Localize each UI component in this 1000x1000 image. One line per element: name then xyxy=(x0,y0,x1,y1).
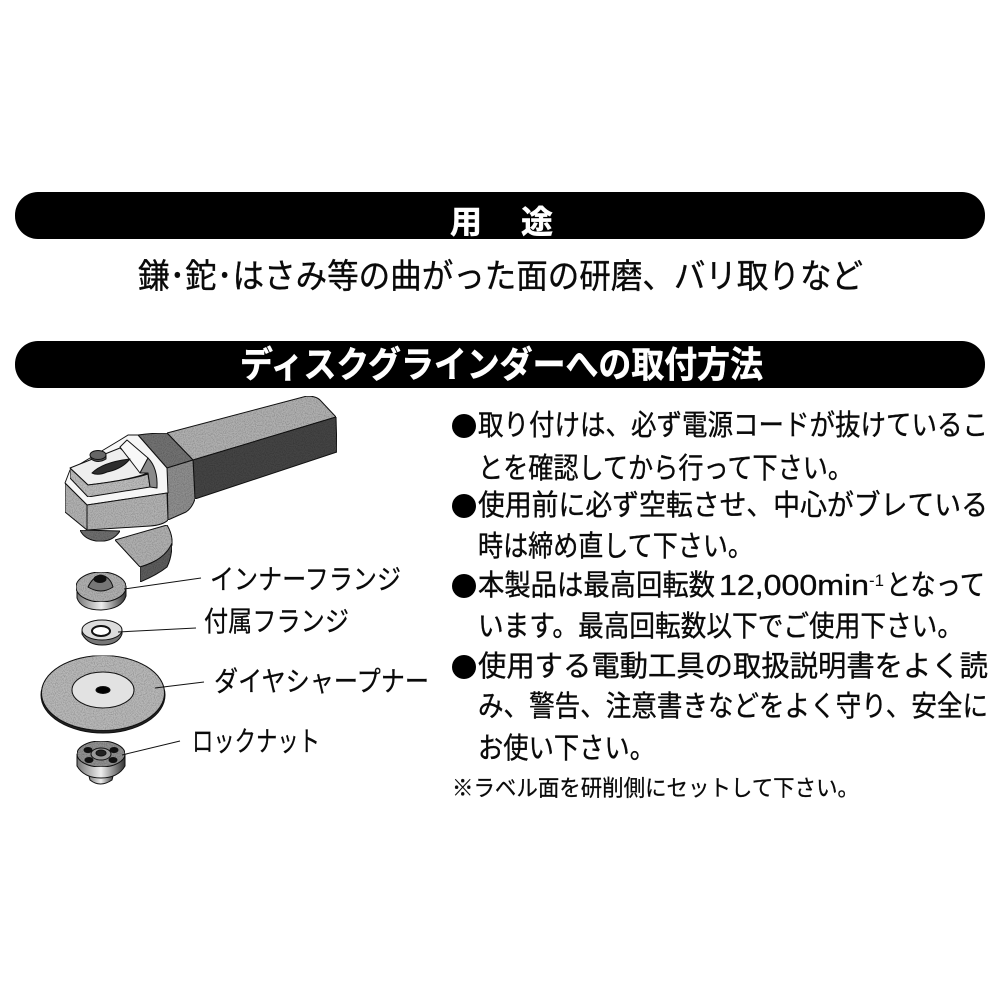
leader line: diamond sharpener xyxy=(155,682,204,688)
icon: inner flange xyxy=(76,572,126,610)
leader line: supplied flange xyxy=(118,628,196,632)
label: lock nut: ロックナット xyxy=(192,726,320,757)
icon: supplied flange xyxy=(82,620,122,645)
instruction 2 xyxy=(452,489,988,563)
instruction 3: 12,000min xyxy=(719,570,869,602)
heading bar: 用途: 用 途 xyxy=(450,204,553,240)
instruction 1 xyxy=(452,409,988,485)
icon: lock nut xyxy=(77,741,125,784)
heading bar: mounting method: ディスクグラインダーへの取付方法 xyxy=(240,344,763,385)
instruction 3: 本製品は最高回転数 xyxy=(478,569,715,602)
heading bar: 用途 xyxy=(15,192,985,240)
label: diamond sharpener: ダイヤシャープナー xyxy=(214,666,429,697)
label: inner flange: インナーフランジ xyxy=(210,564,401,595)
icon: disc grinder xyxy=(65,396,337,582)
instruction 4 xyxy=(452,650,988,765)
leader line: inner flange xyxy=(124,578,201,589)
instruction 4: お使い下さい。 xyxy=(478,732,655,765)
instruction 3 xyxy=(452,569,985,643)
instruction 3: -1 xyxy=(869,571,884,590)
usage text: 鎌･鉈･はさみ等の曲がった面の研磨、バリ取りなど xyxy=(138,258,863,296)
leader line: lock nut xyxy=(122,741,180,755)
instruction 4: 使用する電動工具の取扱説明書をよく読 xyxy=(478,650,988,683)
instruction 1: とを確認してから行って下さい。 xyxy=(478,452,853,485)
instructions text block xyxy=(452,409,988,801)
icon: diamond sharpener disc xyxy=(41,656,165,733)
label: supplied flange: 付属フランジ xyxy=(204,606,349,637)
instruction 3: となって xyxy=(886,570,985,602)
footnote: ※ラベル面を研削側にセットして下さい。 xyxy=(452,776,859,801)
heading bar: mounting method xyxy=(15,341,985,388)
instruction 2: 時は締め直して下さい。 xyxy=(478,530,753,563)
illustration: exploded disc grinder assembly xyxy=(41,396,429,784)
